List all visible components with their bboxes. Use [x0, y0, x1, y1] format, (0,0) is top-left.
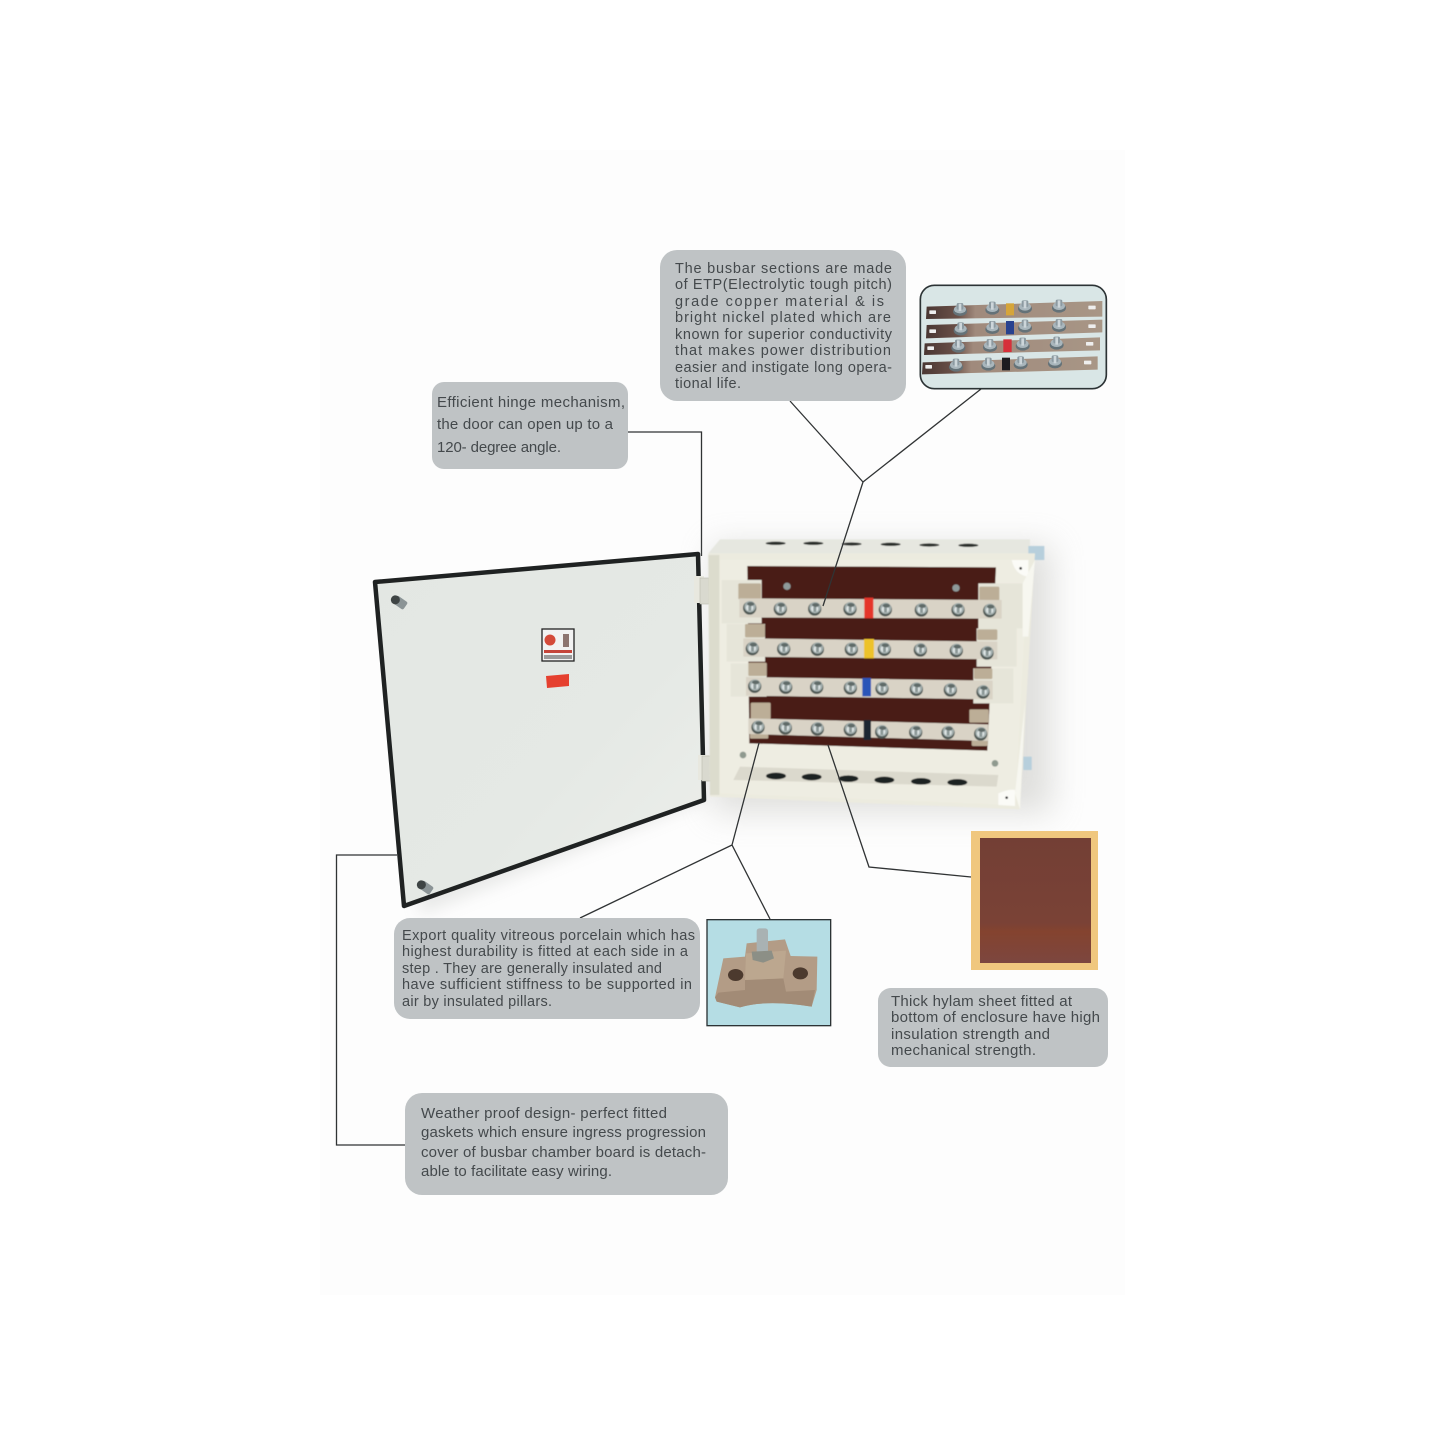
callout: hylam sheet — [878, 988, 1108, 1067]
enclosure shadow — [712, 545, 1052, 813]
inset image: hylam sheet — [971, 831, 1098, 970]
callout: hinge mechanism — [432, 382, 628, 469]
door panel — [375, 554, 704, 906]
callout: busbar sections: that makes power distribution — [675, 343, 891, 359]
callout: busbar sections: known for superior conductivity — [675, 327, 893, 343]
leader lines: busbar — [790, 389, 981, 606]
insulator centre block — [745, 951, 786, 980]
label: red sticker — [546, 674, 569, 688]
callout: porcelain insulators: Export quality vitreous porcelain which has — [402, 928, 695, 944]
callout: porcelain insulators: step . They are generally insulated and — [402, 961, 662, 977]
insulator holes — [728, 969, 743, 981]
insulator front band — [715, 978, 815, 1007]
nut — [752, 951, 774, 963]
right clamp bottom — [1023, 757, 1032, 770]
callout: weather proof design: able to facilitate easy wiring. — [421, 1163, 612, 1180]
right clamp top — [1028, 546, 1044, 560]
callout: busbar sections: of ETP(Electrolytic tough pitch) — [675, 277, 892, 293]
busbar: red phase — [739, 598, 1002, 619]
left flange — [708, 555, 719, 795]
label: warning sticker — [542, 629, 574, 661]
top cable holes — [766, 542, 978, 547]
hinge: upper — [700, 578, 709, 604]
busbar: blue phase — [746, 677, 993, 699]
strip 2 — [926, 319, 1102, 338]
bottom corner bracket — [998, 790, 1015, 806]
callout: hylam sheet: insulation strength and — [891, 1026, 1050, 1043]
door shadow — [395, 570, 705, 915]
enclosure body — [708, 553, 1035, 809]
top corner bracket — [1012, 560, 1028, 577]
callout: busbar sections: bright nickel plated which are — [675, 310, 891, 326]
hylam backing sheet — [747, 566, 996, 751]
bottom cable holes — [766, 773, 967, 786]
enclosure top face — [708, 539, 1030, 553]
busbar: neutral — [748, 718, 988, 741]
leader lines: porcelain insulator — [580, 743, 770, 919]
inset image: copper busbar strips — [920, 285, 1106, 389]
callout: hylam sheet: mechanical strength. — [891, 1042, 1036, 1059]
callout: weather proof design: Weather proof design- perfect fitted — [421, 1105, 667, 1122]
callout: busbar sections: grade copper material & is — [675, 294, 884, 310]
callout: hinge mechanism: Efficient hinge mechanism, — [437, 394, 625, 411]
stud — [757, 928, 768, 953]
strip 1 — [926, 300, 1102, 319]
callout: busbar sections — [660, 250, 906, 401]
callout: busbar sections: easier and instigate long opera- — [675, 360, 892, 376]
leader line: hylam sheet — [828, 745, 971, 877]
callout: weather proof design — [405, 1093, 728, 1195]
open door — [375, 554, 711, 906]
busbar: yellow phase — [743, 638, 997, 660]
bottom gland plate — [733, 767, 998, 787]
callout: busbar sections: tional life. — [675, 376, 741, 392]
hinge gaps — [694, 576, 709, 780]
callout: porcelain insulators — [394, 918, 700, 1019]
callout: hinge mechanism: 120- degree angle. — [437, 439, 561, 456]
hylam mounting screws — [783, 583, 791, 590]
callout: hinge mechanism: the door can open up to a — [437, 416, 614, 433]
callout: hylam sheet: bottom of enclosure have high — [891, 1009, 1100, 1026]
callout: weather proof design: cover of busbar chamber board is detach- — [421, 1144, 706, 1161]
callout: busbar sections: The busbar sections are made — [675, 261, 892, 277]
callout: hylam sheet: Thick hylam sheet fitted at — [891, 993, 1073, 1010]
leader line: weather proof gasket — [336, 855, 405, 1145]
callout: weather proof design: gaskets which ensure ingress progression — [421, 1124, 706, 1141]
leader line: hinge — [628, 432, 702, 556]
callout: porcelain insulators: highest durability is fitted at each side in a — [402, 944, 689, 960]
inner wall — [720, 560, 1028, 805]
insulator block — [715, 939, 817, 1007]
door screw: bottom — [415, 878, 434, 895]
right rail — [1015, 560, 1035, 809]
porcelain insulators — [738, 583, 999, 746]
door screw: top — [389, 593, 408, 610]
enclosure interior, drawn in 3x crop coordinates — [708, 539, 1044, 809]
shelf bar backgrounds — [722, 580, 1023, 703]
strip 3 — [924, 337, 1100, 355]
callout: porcelain insulators: have sufficient stiffness to be supported in — [402, 977, 692, 993]
strip 4 — [922, 355, 1098, 374]
inset image: porcelain insulator — [707, 920, 831, 1026]
hinge: lower — [702, 756, 711, 781]
base screws — [740, 752, 746, 758]
callout: porcelain insulators: air by insulated pillars. — [402, 994, 552, 1010]
